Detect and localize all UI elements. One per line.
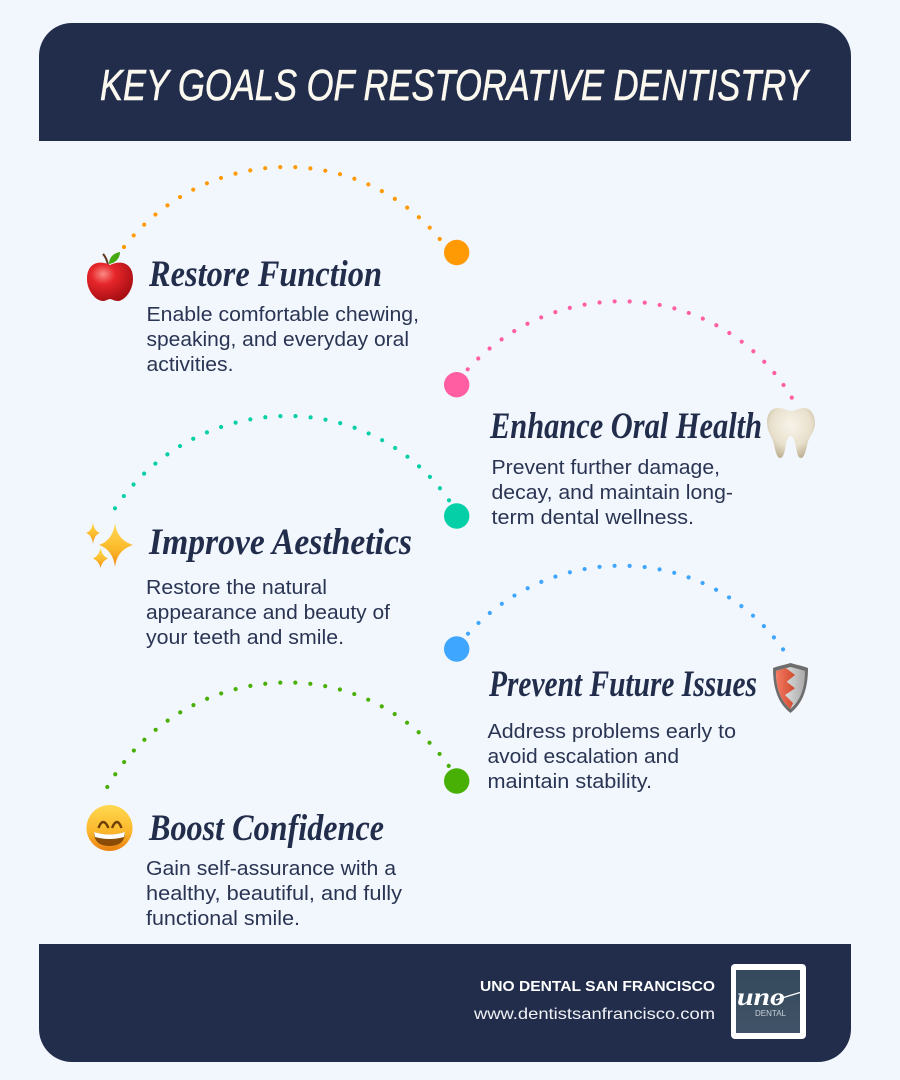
node dot blue <box>444 636 469 662</box>
body text: restore function: activities. <box>146 354 234 376</box>
body text: boost confidence: functional smile. <box>146 908 300 930</box>
body text: boost confidence: healthy, beautiful, and fully <box>146 883 402 905</box>
body text: boost confidence: Gain self-assurance with a <box>146 858 397 880</box>
body text: improve aesthetics <box>146 577 390 649</box>
body text: improve aesthetics: appearance and beauty of <box>146 602 390 624</box>
icon: shield <box>773 663 808 713</box>
heading: improve aesthetics: Improve Aesthetics <box>148 522 412 563</box>
panel: boost confidence <box>86 682 469 930</box>
body text: prevent future issues: Address problems early to <box>488 721 736 743</box>
node dot teal <box>444 503 469 529</box>
panel: improve aesthetics <box>86 416 469 649</box>
website url: www.dentistsanfrancisco.com <box>473 1006 715 1023</box>
heading: prevent future issues: Prevent Future Issues <box>488 664 757 705</box>
logo: uno <box>737 984 785 1011</box>
panel: enhance oral health <box>444 301 815 529</box>
heading: restore function: Restore Function <box>148 254 382 295</box>
heading: boost confidence: Boost Confidence <box>148 808 384 849</box>
heading: enhance oral health: Enhance Oral Health <box>489 406 762 447</box>
body text: restore function: speaking, and everyday oral <box>146 329 409 351</box>
dotted arc pink <box>468 301 792 398</box>
footer banner <box>39 944 851 1062</box>
dotted arc orange <box>124 167 440 247</box>
body text: enhance oral health: term dental wellness. <box>492 507 694 529</box>
icon: sparkles <box>86 522 133 568</box>
body text: prevent future issues: avoid escalation and <box>488 746 679 768</box>
body text: restore function: Enable comfortable chewing, <box>146 304 419 326</box>
header banner <box>39 23 851 141</box>
body text: enhance oral health: Prevent further damage, <box>492 457 720 479</box>
body text: improve aesthetics: your teeth and smile. <box>146 627 344 649</box>
panel: restore function <box>87 167 469 376</box>
body text: improve aesthetics: Restore the natural <box>146 577 327 599</box>
icon: tooth <box>767 408 815 458</box>
logo <box>731 964 806 1039</box>
practice name: UNO DENTAL SAN FRANCISCO <box>480 978 715 995</box>
node dot orange <box>444 240 469 265</box>
body text: enhance oral health: decay, and maintain long- <box>492 482 733 504</box>
body text: enhance oral health <box>492 457 733 529</box>
body text: prevent future issues: maintain stability. <box>488 771 652 793</box>
body text: restore function <box>146 304 419 376</box>
panel: prevent future issues <box>444 566 808 793</box>
node dot pink <box>444 372 469 397</box>
node dot green <box>444 768 469 794</box>
dotted arc teal <box>115 416 449 508</box>
icon: smiling face <box>86 805 132 851</box>
dotted arc blue <box>468 566 783 650</box>
body text: prevent future issues <box>488 721 736 793</box>
dotted arc green <box>107 682 449 787</box>
icon: apple <box>87 252 133 301</box>
logo: DENTAL <box>755 1009 787 1018</box>
body text: boost confidence <box>146 858 402 930</box>
